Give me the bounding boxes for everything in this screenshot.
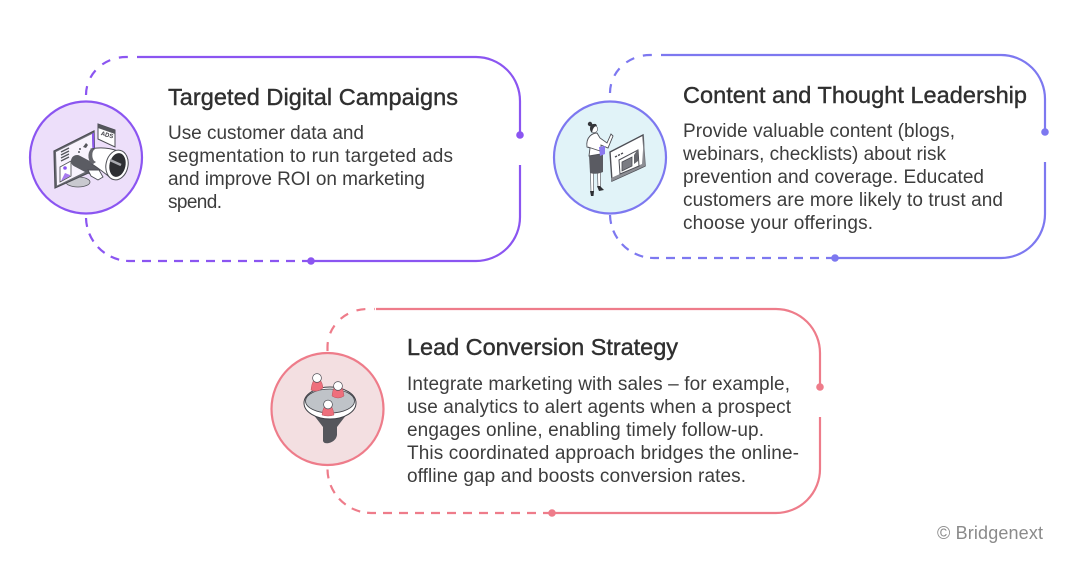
body text: segmentation to run targeted ads — [168, 146, 453, 167]
body text: choose your offerings. — [683, 213, 873, 234]
panel: targeted digital campaigns — [30, 57, 524, 265]
body text: webinars, checklists) about risk — [682, 144, 946, 165]
copyright: © Bridgenext — [937, 523, 1043, 543]
frame: coral path — [327, 309, 824, 517]
body text — [682, 121, 1003, 234]
body text: engages online, enabling timely follow-up. — [407, 420, 764, 441]
body text: Integrate marketing with sales – for example, — [407, 374, 790, 395]
panel: content and thought leadership — [554, 55, 1049, 262]
frame: indigo path — [610, 55, 1049, 262]
icon circle: megaphone and monitor — [30, 102, 142, 214]
heading: Lead Conversion Strategy — [407, 334, 678, 360]
body text: Use customer data and — [168, 123, 364, 144]
body text: Provide valuable content (blogs, — [683, 121, 955, 142]
heading: Targeted Digital Campaigns — [168, 84, 458, 110]
body text — [168, 123, 453, 213]
body text: spend. — [168, 192, 222, 213]
heading: Content and Thought Leadership — [683, 82, 1027, 108]
body text: offline gap and boosts conversion rates. — [407, 466, 746, 487]
body text: This coordinated approach bridges the online- — [407, 443, 799, 464]
body text: and improve ROI on marketing — [168, 169, 425, 190]
body text — [407, 374, 799, 487]
body text: customers are more likely to trust and — [683, 190, 1003, 211]
body text: use analytics to alert agents when a prospect — [407, 397, 792, 418]
icon circle: megaphone and monitor: ADS — [100, 131, 114, 140]
panel: lead conversion strategy — [272, 309, 824, 517]
icon circle: sales funnel with people — [272, 353, 384, 465]
presenter figure — [587, 122, 613, 196]
body text: prevention and coverage. Educated — [683, 167, 984, 188]
icon circle: presenter and video screen — [554, 102, 666, 214]
frame: purple path — [86, 57, 524, 265]
